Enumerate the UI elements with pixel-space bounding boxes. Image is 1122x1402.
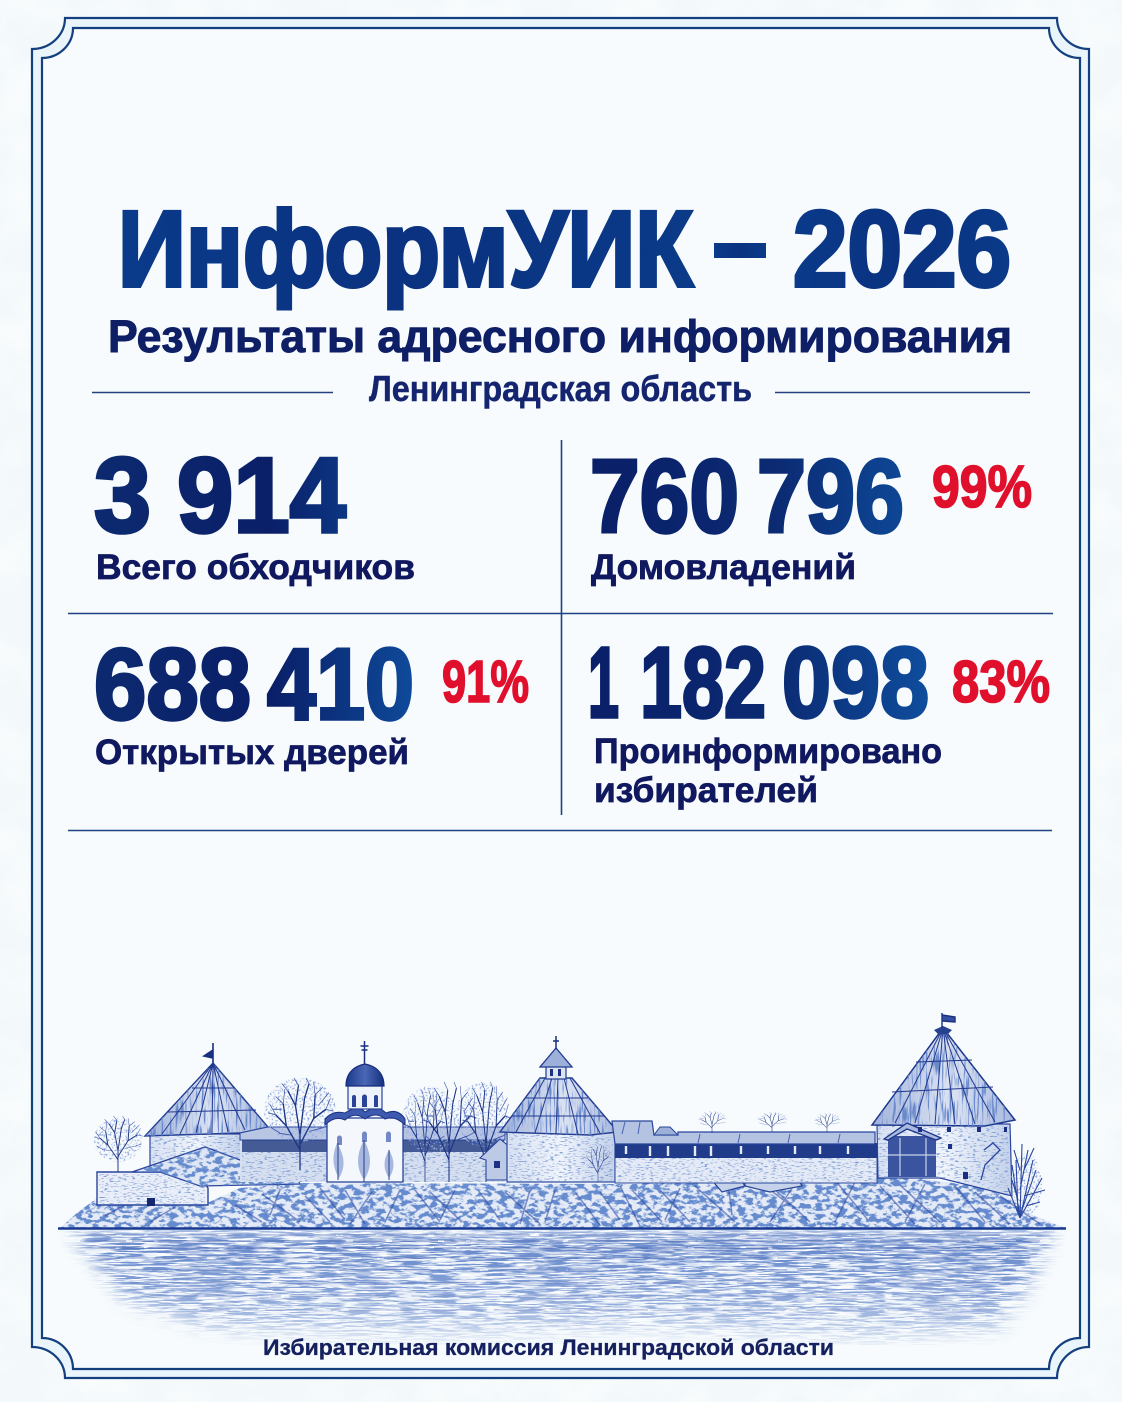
stat: total canvassers: Всего обходчиков xyxy=(96,548,415,587)
trees around the church xyxy=(264,1078,511,1182)
water with reflections xyxy=(60,1230,1065,1345)
stat: households xyxy=(590,439,1032,587)
hill slope over bastion xyxy=(132,1147,300,1186)
stat: total canvassers: 914 xyxy=(177,435,346,555)
stat: open doors: 688 xyxy=(94,629,251,741)
stat: informed voters: 098 xyxy=(782,627,929,739)
island rocks xyxy=(58,1168,1066,1228)
stat: households: 760 xyxy=(590,439,739,555)
footer organization name: Избирательная комиссия Ленинградской области xyxy=(263,1335,834,1360)
small annex roof xyxy=(480,1139,526,1180)
subtitle: Результаты адресного информирования xyxy=(108,311,1012,362)
wall behind the church xyxy=(240,1127,505,1182)
stat: total canvassers xyxy=(94,435,415,587)
percent: households: 99% xyxy=(932,454,1032,520)
left low bastion xyxy=(97,1172,208,1206)
central tower with turret xyxy=(500,1036,618,1182)
stat: open doors: Открытых дверей xyxy=(95,733,409,772)
stat: households: Домовладений xyxy=(591,548,856,587)
stat: informed voters: Проинформировано xyxy=(594,732,942,771)
stat: open doors: 410 xyxy=(267,629,414,741)
stat: households: 796 xyxy=(757,439,904,555)
church with dome and cross xyxy=(325,1041,405,1182)
stats grid lines xyxy=(68,440,1053,830)
long fortress wall with gallery xyxy=(612,1111,877,1183)
title: ИнформУИК xyxy=(118,188,694,309)
illustration: fortress on the island xyxy=(58,1013,1066,1345)
percent: open doors: 91% xyxy=(442,649,529,715)
stat: informed voters xyxy=(588,627,1050,810)
stat: informed voters: избирателей xyxy=(594,771,818,810)
stat: open doors xyxy=(94,629,529,772)
stat: informed voters: 1 xyxy=(588,627,619,739)
left tree xyxy=(94,1116,143,1172)
right round tower with porch and flag xyxy=(872,1013,1015,1196)
stat: total canvassers: 3 xyxy=(94,435,151,555)
percent: informed voters: 83% xyxy=(952,649,1050,715)
right bush xyxy=(1008,1144,1045,1218)
left round tower xyxy=(145,1043,268,1172)
region line with side rules: Ленинградская область xyxy=(369,368,752,409)
title: 2026 xyxy=(793,188,1011,309)
stat: informed voters: 182 xyxy=(640,627,766,739)
